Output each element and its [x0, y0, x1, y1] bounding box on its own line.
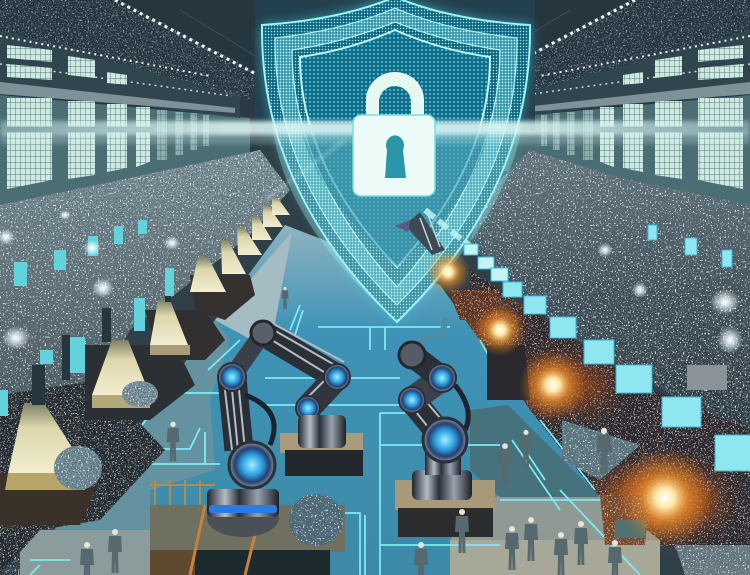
- aisle: [215, 232, 292, 350]
- orange ambient glow: [451, 304, 720, 530]
- warm machines on the right: [470, 270, 750, 560]
- inner band: [292, 22, 500, 287]
- right robot arm: [399, 318, 472, 500]
- right monitors: [464, 225, 750, 471]
- left robot pedestal: [280, 415, 363, 476]
- left grey floor: [30, 320, 230, 575]
- keyhole: [385, 135, 406, 178]
- middle band: [275, 8, 517, 305]
- lamp cones: [8, 403, 88, 473]
- centre back wall: [255, 0, 535, 130]
- shield core: [300, 30, 490, 267]
- left robot platform: [150, 480, 345, 575]
- right machinery field: [470, 150, 750, 440]
- left lamp machines: [0, 197, 290, 575]
- right beige floor: [450, 495, 660, 540]
- left factory hall windows: [0, 0, 265, 215]
- shield glow: [262, 0, 530, 322]
- lock body: [353, 115, 435, 196]
- lower brightening: [272, 125, 522, 322]
- sparkle cluster: [54, 446, 102, 490]
- left machine towers: [32, 272, 171, 405]
- left robot arm: [207, 321, 350, 537]
- diagonal light beam: [265, 140, 345, 200]
- right robot pedestal: [395, 480, 495, 537]
- outer band: [262, 0, 530, 322]
- shackle: [366, 72, 424, 118]
- left monitors: [0, 220, 174, 416]
- platform sparkle cluster: [289, 494, 343, 546]
- factory floor: [20, 225, 660, 575]
- flare lights: [426, 243, 743, 546]
- left machinery field: [0, 150, 290, 575]
- padlock: [353, 72, 435, 196]
- right machines: [448, 290, 750, 575]
- factory workers: [80, 287, 622, 575]
- shield: [262, 0, 530, 322]
- left sparkle cluster: [122, 381, 158, 407]
- horizontal light haze band: [0, 121, 750, 144]
- robot claw at shield: [395, 210, 475, 255]
- left glow lights: [0, 210, 180, 350]
- floor circuit lines: [30, 305, 640, 575]
- right factory hall windows: [485, 0, 750, 215]
